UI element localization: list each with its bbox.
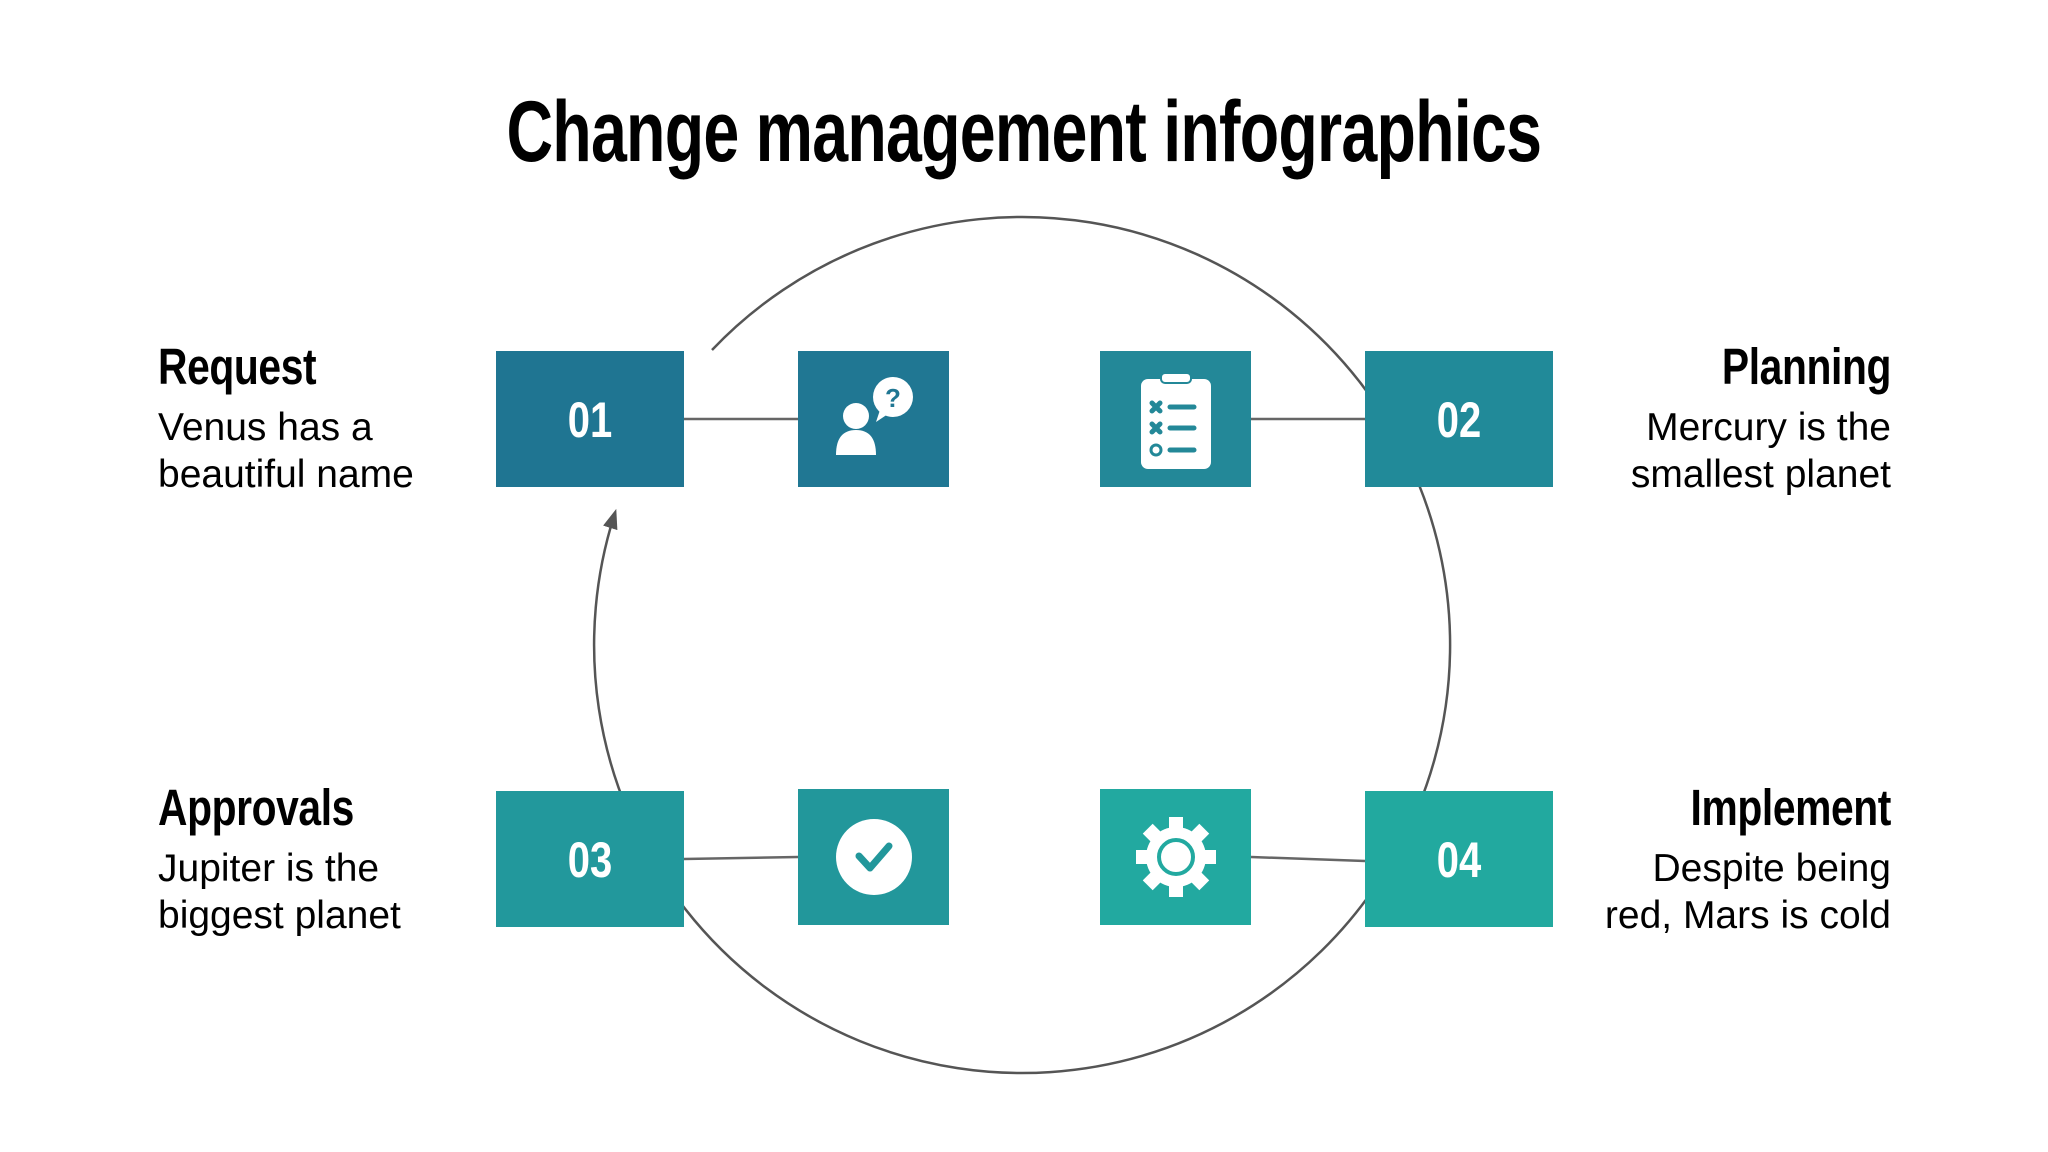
box 02 [1365,351,1553,487]
box 04: 04 [1437,832,1481,888]
label: Approvals: biggest planet [158,894,401,937]
label: Implement: red, Mars is cold [1605,894,1891,937]
connector lines [684,419,1365,861]
box 01: 01 [568,392,612,448]
label: Planning [1631,338,1891,496]
icon box: clipboard checklist [1100,351,1251,487]
label: Implement [1605,779,1891,937]
label: Approvals: Approvals [158,779,354,836]
label: Planning: smallest planet [1631,453,1891,496]
cycle arc with arrow [594,217,1450,1073]
label: Implement: Despite being [1652,847,1891,890]
label: Approvals [158,779,401,937]
icon box: gear [1100,789,1251,925]
icon box: check [798,789,949,925]
icon box: person with question: ? [885,383,901,413]
box 03: 03 [568,832,612,888]
box 04 [1365,791,1553,927]
label: Approvals: Jupiter is the [158,847,379,890]
box 01 [496,351,684,487]
label: Planning: Mercury is the [1646,406,1891,449]
label: Request: Venus has a [158,406,373,449]
box 03 [496,791,684,927]
label: Planning: Planning [1722,338,1891,395]
label: Request: Request [158,338,316,395]
label: Implement: Implement [1691,779,1891,836]
label: Request: beautiful name [158,453,414,496]
icon box: person with question [798,351,949,487]
box 02: 02 [1437,392,1481,448]
label: Request [158,338,414,496]
title: Change management infographics [507,84,1541,180]
